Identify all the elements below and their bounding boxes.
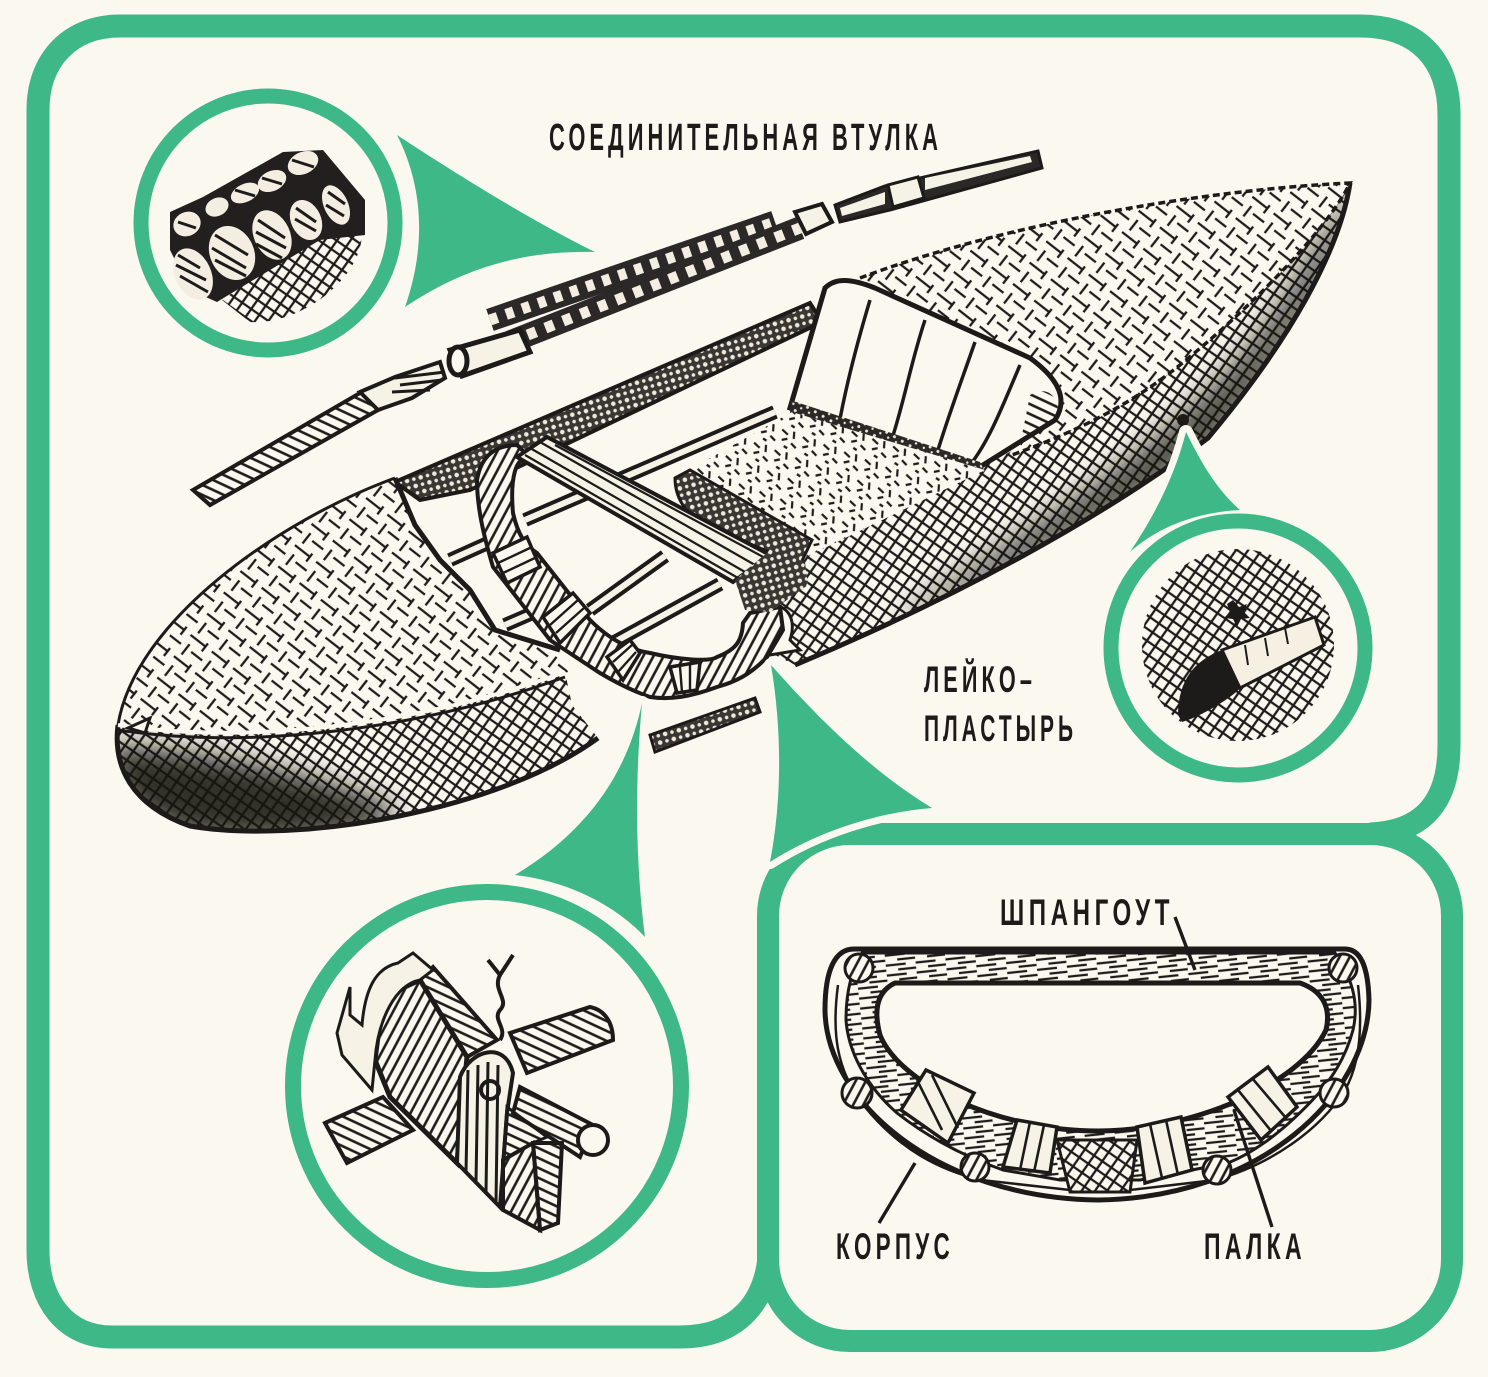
seat back	[790, 280, 1061, 472]
cross stick far side	[510, 1007, 613, 1073]
lashings on frame	[901, 1067, 1297, 1183]
label: stick: ПАЛКА	[1204, 1226, 1306, 1267]
bow deck	[118, 478, 568, 738]
detail circle: lashing	[293, 892, 681, 1280]
heading: connector sleeve: СОЕДИНИТЕЛЬНАЯ ВТУЛКА	[549, 117, 942, 159]
pointer: lashing detail	[515, 703, 645, 937]
cross-section drawing: hull shell and frame	[825, 949, 1369, 1200]
knot at board end	[735, 550, 808, 612]
stern hull	[745, 175, 1360, 665]
lashing wraps	[457, 1052, 513, 1207]
cockpit rails	[395, 303, 822, 650]
panel border	[768, 834, 1452, 1341]
pointer: connector detail	[397, 135, 595, 307]
mesh fabric patch	[1142, 549, 1334, 741]
seat cushion	[675, 412, 985, 565]
paddle shaft: right end	[835, 151, 1042, 222]
stringer hatching	[843, 955, 1356, 1183]
label: hull: КОРПУС	[836, 1226, 954, 1267]
leader lines	[879, 917, 1272, 1227]
stringers	[842, 954, 1357, 1184]
frame ring	[477, 437, 808, 698]
crossbar board	[517, 437, 770, 582]
hole star	[1224, 600, 1250, 627]
plaster spot	[1177, 414, 1189, 426]
canoe	[109, 175, 1360, 840]
central fitting	[1057, 1140, 1137, 1192]
detail circle: plaster	[1111, 521, 1365, 775]
label: frame: ШПАНГОУТ	[1000, 892, 1174, 933]
label: adhesive plaster: ПЛАСТЫРЬ	[924, 708, 1077, 749]
stern deck	[860, 183, 1350, 455]
board end	[503, 1107, 562, 1230]
frame board	[337, 953, 497, 1163]
twisted wire ends	[488, 955, 513, 1040]
windings drawing	[165, 146, 365, 322]
label: adhesive plaster	[924, 658, 1077, 749]
pointer: frame panel	[770, 665, 932, 862]
bow hull	[109, 672, 598, 840]
panel: frame cross-section	[768, 834, 1452, 1341]
paddle / sectional stick	[193, 151, 1042, 505]
cross stick near side	[325, 1097, 413, 1163]
double tube assembly with windings	[449, 204, 832, 376]
second stick	[513, 1087, 593, 1157]
detail circle: tube windings	[141, 96, 395, 350]
lower tube under canoe	[650, 698, 760, 752]
paddle shaft: left end	[193, 362, 445, 505]
plaster strip	[1178, 617, 1324, 722]
bow tip fitting	[128, 718, 150, 733]
frame lashings	[493, 537, 700, 693]
lashing drawing	[325, 953, 613, 1230]
pointer triangles	[397, 135, 1240, 937]
label: adhesive plaster: ЛЕЙКО–	[924, 658, 1036, 700]
pointer: plaster detail	[1130, 432, 1240, 552]
